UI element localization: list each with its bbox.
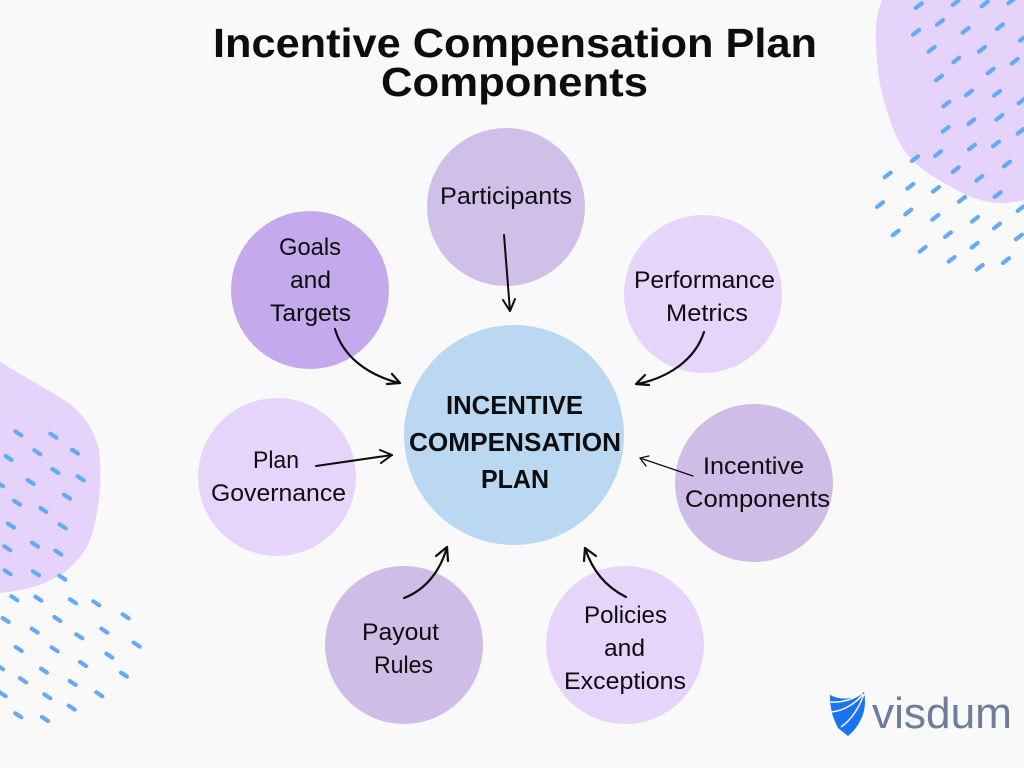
circle: payout rules: Rules	[374, 652, 433, 679]
circle: participants	[427, 128, 585, 286]
circle: participants: Participants	[440, 183, 572, 210]
circle: goals and targets	[231, 211, 389, 369]
circle: policies and exceptions: Exceptions	[564, 668, 686, 695]
circle: performance metrics	[624, 215, 782, 373]
circle: policies and exceptions: and	[604, 635, 645, 662]
decorative blob left	[0, 362, 100, 593]
arrow: payout to center	[404, 547, 448, 598]
circle: plan governance	[198, 398, 356, 556]
title: Incentive Compensation Plan	[213, 20, 817, 66]
center circle: incentive compensation plan: PLAN	[481, 464, 549, 494]
circle: incentive components: Incentive	[703, 453, 804, 480]
logo: visdum: visdum	[872, 689, 1012, 738]
circle: incentive components: Components	[685, 486, 830, 513]
circle: performance metrics: Metrics	[666, 300, 748, 327]
dash pattern left	[0, 431, 140, 721]
arrow: performance to center	[636, 332, 704, 385]
title	[213, 20, 817, 105]
circle: payout rules	[325, 566, 483, 724]
arrow: participants to center	[503, 235, 515, 311]
circle: performance metrics: Performance	[634, 267, 775, 294]
center circle: incentive compensation plan: COMPENSATION	[409, 427, 621, 457]
circle: goals and targets: and	[290, 267, 331, 294]
circle: plan governance: Plan	[253, 447, 299, 474]
center circle: incentive compensation plan: INCENTIVE	[446, 390, 583, 420]
arrow: policies to center	[584, 548, 626, 597]
dash pattern top right	[877, 0, 1024, 270]
center circle: incentive compensation plan	[404, 325, 624, 545]
circle: policies and exceptions: Policies	[584, 602, 667, 629]
circle: incentive components	[675, 404, 833, 562]
circle: policies and exceptions	[546, 566, 704, 724]
circle: goals and targets: Targets	[270, 300, 351, 327]
circle: plan governance: Governance	[211, 480, 346, 507]
arrow: incentive components to center	[640, 456, 693, 476]
circle: payout rules: Payout	[362, 619, 439, 646]
icon: shield	[830, 692, 865, 736]
decorative blob top right	[876, 0, 1024, 203]
circle: goals and targets: Goals	[279, 234, 341, 261]
arrow: plan governance to center	[316, 450, 392, 466]
arrow: goals to center	[335, 329, 400, 384]
title: Components	[381, 59, 648, 105]
